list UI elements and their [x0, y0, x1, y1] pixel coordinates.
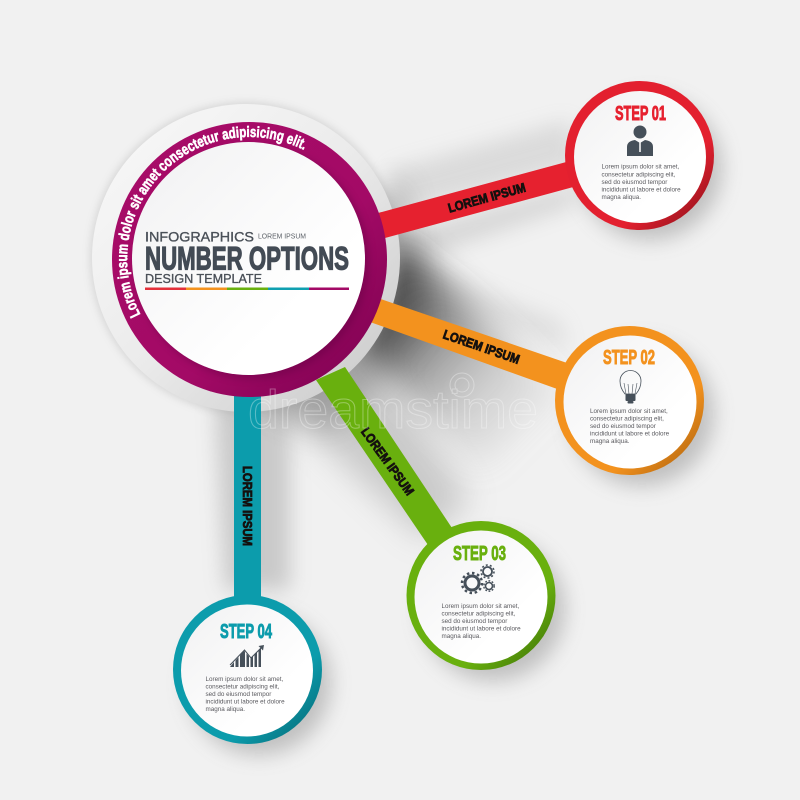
curved ring text: Lorem ipsum dolor sit amet consectetur adipisicing elit.	[117, 126, 305, 319]
outer pale disc	[92, 104, 400, 412]
step 04 body: Lorem ipsum dolor sit amet,	[206, 676, 283, 683]
label: orange bar: LOREM IPSUM	[441, 327, 522, 367]
step 03 title: STEP 03	[453, 543, 506, 565]
step 04 title: STEP 04	[220, 621, 273, 643]
step 03 body: incididunt ut labore et dolore	[442, 626, 521, 632]
step 01 body: sed do eiusmod tempor	[602, 179, 667, 186]
bar labels	[240, 180, 527, 546]
step 03 body: sed do eiusmod tempor	[442, 618, 507, 625]
step 02 body: incididunt ut labore et dolore	[590, 430, 670, 438]
step 04 body: incididunt ut labore et dolore	[206, 698, 285, 706]
step 01 title: STEP 01	[615, 103, 666, 125]
step 04 body: sed do eiusmod tempor	[206, 691, 271, 698]
step 02 body: magna aliqua.	[590, 438, 630, 445]
step 01 body: incididunt ut labore et dolore	[602, 186, 681, 194]
step 03 body: Lorem ipsum dolor sit amet,	[442, 603, 519, 610]
label: green bar: LOREM IPSUM	[358, 425, 417, 498]
step 04	[173, 595, 322, 744]
step 03 body: consectetur adipiscing elit,	[442, 610, 516, 618]
inner disc shadow	[135, 145, 369, 379]
icon: light bulb	[620, 370, 641, 404]
step 01 body: Lorem ipsum dolor sit amet,	[602, 164, 679, 170]
step 01 body: magna aliqua.	[602, 194, 641, 201]
magenta ring	[112, 122, 387, 397]
step 01 body: consectetur adipiscing elit,	[602, 172, 676, 178]
heading: number options: NUMBER OPTIONS	[145, 240, 349, 276]
step 02 body: Lorem ipsum dolor sit amet,	[590, 408, 668, 415]
step 03	[406, 521, 556, 670]
bar: orange	[370, 296, 570, 390]
step 03 body: magna aliqua.	[442, 633, 481, 640]
bar: teal	[234, 390, 261, 602]
step 02 body: sed do eiusmod tempor	[590, 423, 656, 430]
icon: growth chart	[230, 645, 264, 667]
icon: person	[627, 126, 653, 156]
step 01	[565, 81, 714, 230]
label: teal bar: LOREM IPSUM	[240, 466, 255, 546]
heading: infographics: INFOGRAPHICS	[145, 228, 254, 244]
step 04 body: consectetur adipiscing elit,	[206, 684, 280, 690]
step 02 body: consectetur adipiscing elit,	[590, 416, 664, 422]
bar: green	[316, 367, 452, 545]
soft long shadows	[90, 96, 722, 755]
title block	[145, 228, 349, 290]
heading: design template: DESIGN TEMPLATE	[145, 271, 262, 286]
label: red bar: LOREM IPSUM	[446, 180, 527, 216]
rainbow rule	[145, 288, 349, 290]
main circle	[112, 122, 387, 397]
inner white disc	[132, 142, 365, 375]
bar: red	[378, 161, 577, 238]
watermark: dreamstime	[248, 380, 538, 440]
step 02 title: STEP 02	[603, 347, 655, 369]
step 02	[555, 326, 704, 475]
step 04 body: magna aliqua.	[206, 706, 245, 713]
icon: gears	[462, 565, 494, 593]
small tag: LOREM IPSUM	[258, 234, 306, 240]
